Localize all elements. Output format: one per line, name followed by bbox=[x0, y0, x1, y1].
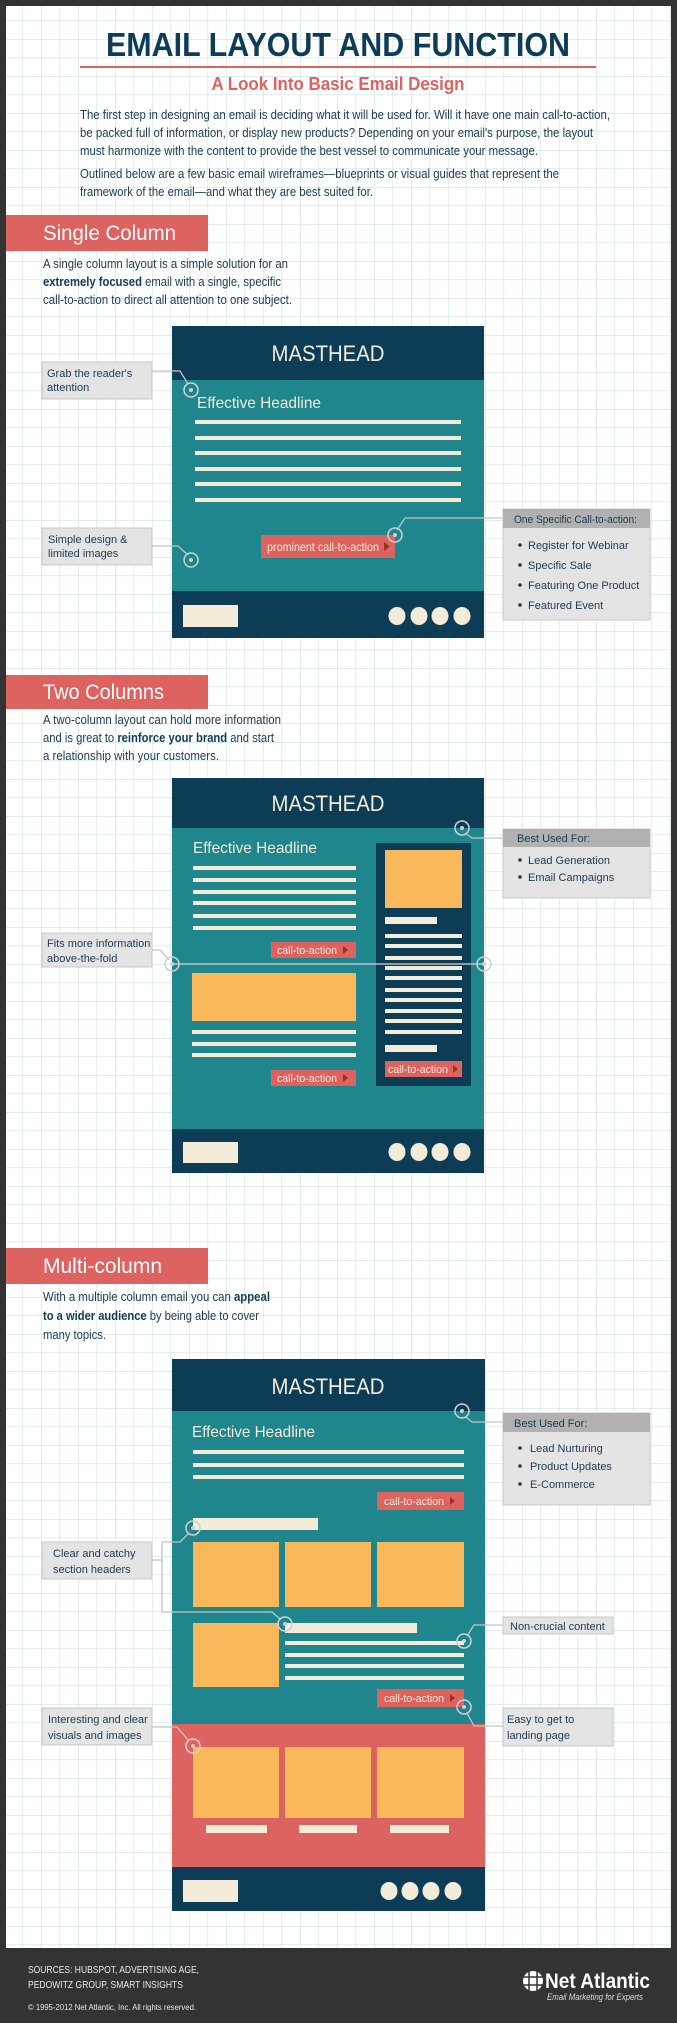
intro text: Outlined below are a few basic email wireframes—blueprints or visual guides that represent the bbox=[80, 167, 559, 181]
callout: non-crucial content bbox=[457, 1617, 613, 1648]
callout: one specific call-to-action: Featured Event bbox=[528, 600, 603, 612]
callout: best used for (multi): Best Used For: bbox=[514, 1418, 587, 1430]
text: multi-column description: With a multiple column email you can appeal bbox=[43, 1290, 270, 1304]
callout: interesting and clear visuals: visuals and images bbox=[48, 1730, 142, 1742]
intro text: The first step in designing an email is deciding what it will be used for. Will it have one main call-to-action, bbox=[80, 108, 610, 122]
callout: one specific call-to-action: One Specific Call-to-action: bbox=[514, 514, 637, 526]
wireframe: two column email: MASTHEAD bbox=[272, 791, 384, 816]
heading: Single Column bbox=[6, 215, 208, 251]
wireframe: multi-column email: MASTHEAD bbox=[272, 1374, 384, 1399]
callout: clear and catchy section headers: Clear and catchy bbox=[53, 1548, 136, 1560]
text: single column description: A single column layout is a simple solution for an bbox=[43, 257, 288, 271]
text: two columns description bbox=[43, 713, 281, 763]
heading: Multi-column bbox=[6, 1248, 208, 1284]
callout: one specific call-to-action bbox=[388, 509, 650, 620]
callout: fits more information above-the-fold bbox=[42, 933, 491, 971]
sidebar column bbox=[376, 843, 471, 1086]
button: call-to-action 1 bbox=[271, 942, 356, 958]
heading: Two Columns: Two Columns bbox=[43, 681, 164, 704]
callout: grab attention bbox=[42, 362, 198, 399]
heading: Two Columns bbox=[6, 675, 208, 709]
callout: fits more information above-the-fold: Fits more information bbox=[47, 938, 150, 950]
callout: interesting and clear visuals: Interesting and clear bbox=[48, 1714, 148, 1726]
button: call-to-action 1: call-to-action bbox=[277, 945, 337, 957]
wireframe: multi-column email bbox=[172, 1359, 485, 1911]
footer: sources: PEDOWITZ GROUP, SMART INSIGHTS bbox=[28, 1979, 183, 1991]
intro text: must harmonize with the content to provide the best vessel to communicate your message. bbox=[80, 144, 538, 158]
subtitle: A Look Into Basic Email Design bbox=[212, 74, 464, 94]
button: call-to-action 2: call-to-action bbox=[277, 1073, 337, 1085]
text: multi-column description: to a wider audience by being able to cover bbox=[43, 1309, 259, 1323]
callout: non-crucial content: Non-crucial content bbox=[510, 1621, 605, 1633]
button: prominent call-to-action bbox=[261, 535, 395, 558]
footer: sources bbox=[28, 1964, 199, 2012]
callout: grab attention: Grab the reader's bbox=[47, 368, 133, 380]
text: two columns description: and is great to reinforce your brand and start bbox=[43, 731, 274, 745]
callout: best used for (two columns) bbox=[455, 821, 650, 898]
callout: best used for (two columns): Lead Generation bbox=[528, 855, 610, 867]
callout: grab attention: attention bbox=[47, 382, 89, 394]
callout: best used for (multi): Lead Nurturing bbox=[530, 1443, 603, 1455]
intro text: framework of the email—and what they are best suited for. bbox=[80, 185, 373, 199]
button: call-to-action top bbox=[377, 1492, 464, 1510]
wireframe: single column email: MASTHEAD bbox=[272, 341, 384, 366]
callout: one specific call-to-action: Featuring One Product bbox=[528, 580, 639, 592]
wireframe: multi-column email: Effective Headline bbox=[192, 1424, 315, 1441]
image band bbox=[172, 1724, 485, 1867]
callout: simple design bbox=[42, 528, 198, 567]
button: call-to-action bottom: call-to-action bbox=[384, 1693, 444, 1705]
callout: best used for (two columns): Email Campaigns bbox=[528, 872, 615, 884]
callout: easy to get to landing page: Easy to get to bbox=[507, 1714, 574, 1726]
callout: easy to get to landing page bbox=[457, 1700, 613, 1746]
text: multi-column description bbox=[43, 1290, 270, 1342]
callout: one specific call-to-action: Specific Sale bbox=[528, 560, 592, 572]
callout: simple design: limited images bbox=[48, 548, 119, 560]
heading: Multi-column: Multi-column bbox=[43, 1255, 162, 1278]
title: EMAIL LAYOUT AND FUNCTION bbox=[106, 26, 570, 63]
intro text bbox=[80, 108, 610, 199]
text: multi-column description: many topics. bbox=[43, 1328, 106, 1342]
footer: sources: © 1995-2012 Net Atlantic, Inc. All rights reserved. bbox=[28, 2003, 196, 2012]
button: prominent call-to-action: prominent call-to-action bbox=[267, 540, 379, 554]
wireframe: two column email: Effective Headline bbox=[193, 840, 317, 857]
text: single column description: extremely focused email with a single, specific bbox=[43, 275, 281, 289]
wireframe: two column email bbox=[172, 778, 484, 1173]
text: two columns description: A two-column layout can hold more information bbox=[43, 713, 281, 727]
button: call-to-action 2 bbox=[271, 1070, 356, 1086]
callout: best used for (multi) bbox=[455, 1404, 650, 1505]
text: single column description bbox=[43, 257, 292, 307]
button: call-to-action bottom bbox=[377, 1689, 464, 1707]
callout: simple design: Simple design & bbox=[48, 534, 128, 546]
heading: Single Column: Single Column bbox=[43, 222, 176, 245]
wireframe: single column email: Effective Headline bbox=[197, 395, 321, 412]
callout: one specific call-to-action: Register for Webinar bbox=[528, 540, 629, 552]
text: single column description: call-to-action to direct all attention to one subject. bbox=[43, 293, 292, 307]
logo: Net Atlantic: Net Atlantic bbox=[545, 1970, 650, 1993]
logo: Net Atlantic bbox=[523, 1970, 650, 2002]
callout: best used for (multi): E-Commerce bbox=[530, 1479, 595, 1491]
sidebar column: call-to-action bbox=[388, 1064, 448, 1076]
callout: clear and catchy section headers bbox=[42, 1521, 292, 1631]
callout: best used for (two columns): Best Used For: bbox=[517, 833, 590, 845]
logo: Net Atlantic: Email Marketing for Experts bbox=[547, 1992, 643, 2002]
callout: interesting and clear visuals bbox=[42, 1708, 200, 1753]
callout: clear and catchy section headers: section headers bbox=[53, 1564, 131, 1576]
button: call-to-action top: call-to-action bbox=[384, 1496, 444, 1508]
text: two columns description: a relationship with your customers. bbox=[43, 749, 219, 763]
intro text: be packed full of information, or display new products? Depending on your email's purpose, the layout bbox=[80, 126, 593, 140]
callout: fits more information above-the-fold: above-the-fold bbox=[47, 953, 117, 965]
wireframe: single column email bbox=[172, 326, 484, 638]
callout: easy to get to landing page: landing page bbox=[507, 1730, 570, 1742]
callout: best used for (multi): Product Updates bbox=[530, 1461, 612, 1473]
footer: sources: SOURCES: HUBSPOT, ADVERTISING AGE, bbox=[28, 1964, 199, 1976]
